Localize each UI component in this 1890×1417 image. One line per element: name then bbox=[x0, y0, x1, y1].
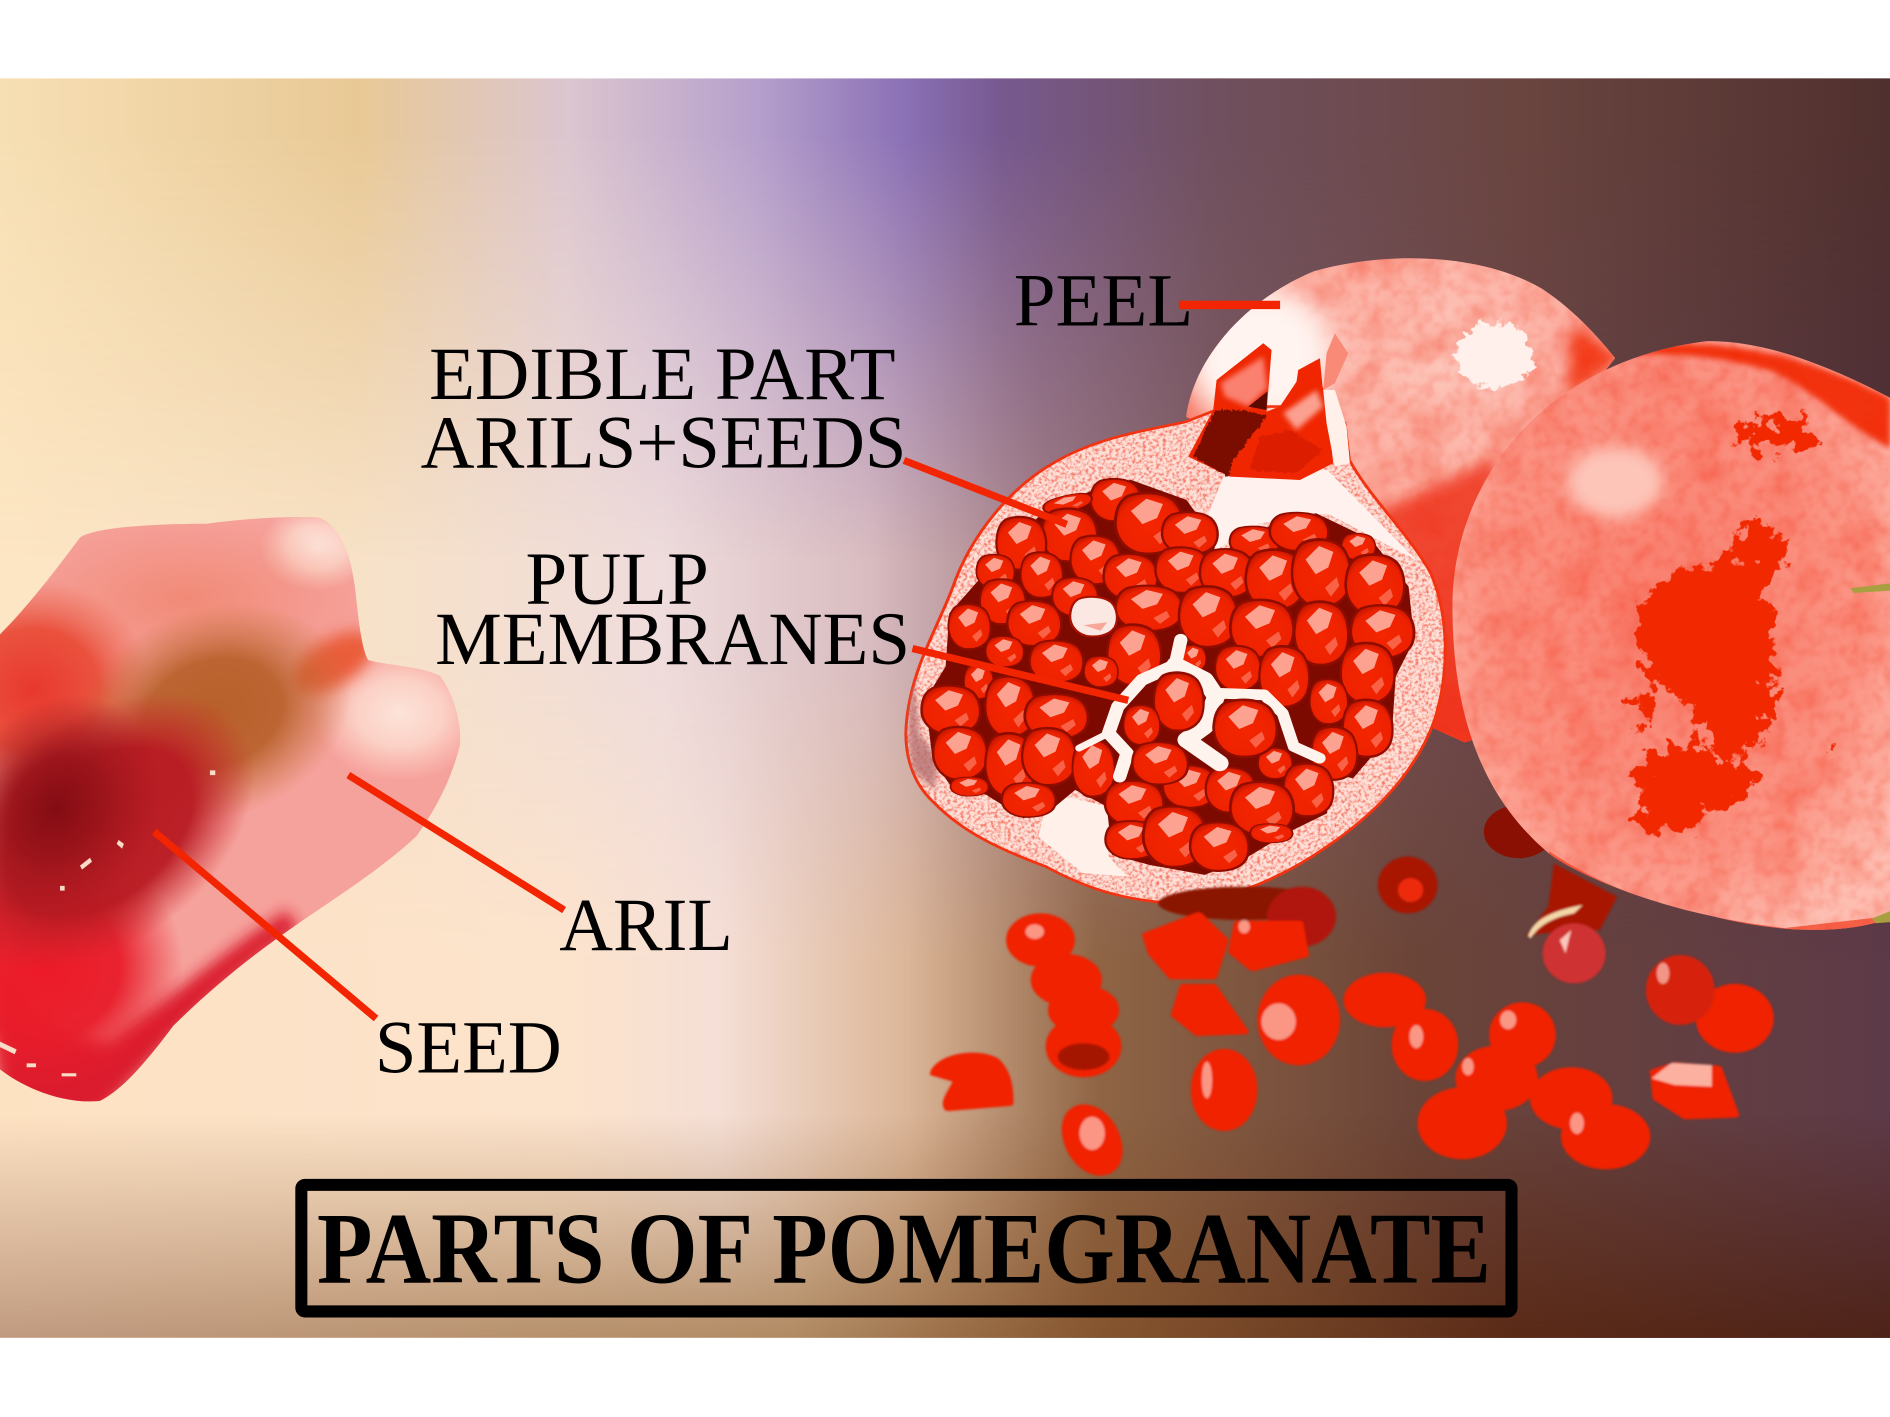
label: pulp membranes: PULP bbox=[526, 538, 709, 621]
image: cut pomegranate with arils bbox=[890, 393, 1460, 913]
image: front pomegranate bbox=[1446, 337, 1890, 940]
pulp membranes bbox=[1079, 640, 1320, 777]
stem tips bbox=[1850, 583, 1890, 923]
label: pulp membranes bbox=[435, 538, 910, 681]
label: aril: ARIL bbox=[559, 884, 733, 967]
label: pulp membranes: MEMBRANES bbox=[435, 598, 910, 681]
leader line: pulp membranes bbox=[912, 648, 1128, 700]
label: edible part bbox=[421, 333, 906, 485]
leader line: peel bbox=[1179, 301, 1280, 308]
title box: PARTS OF POMEGRANATE bbox=[317, 1192, 1491, 1304]
image: scattered arils bbox=[934, 857, 1769, 1175]
image: dark aril behind the fruit bbox=[1484, 805, 1554, 858]
leader line: seed bbox=[154, 832, 376, 1019]
arils inside the fruit bbox=[922, 479, 1414, 871]
arils inside the membranes bbox=[1124, 673, 1277, 784]
image: aril and seed close-up bbox=[0, 504, 487, 1117]
image: back pomegranate bbox=[1186, 258, 1616, 742]
leader line: edible part bbox=[904, 460, 1067, 524]
leader line: aril bbox=[348, 775, 564, 910]
label: peel: PEEL bbox=[1014, 259, 1193, 342]
image: crown of the cut fruit bbox=[1188, 333, 1350, 480]
aril cavities bbox=[925, 480, 1414, 875]
label: edible part: ARILS+SEEDS bbox=[421, 402, 906, 485]
label: edible part: EDIBLE PART bbox=[429, 333, 896, 416]
label: seed: SEED bbox=[375, 1007, 562, 1090]
